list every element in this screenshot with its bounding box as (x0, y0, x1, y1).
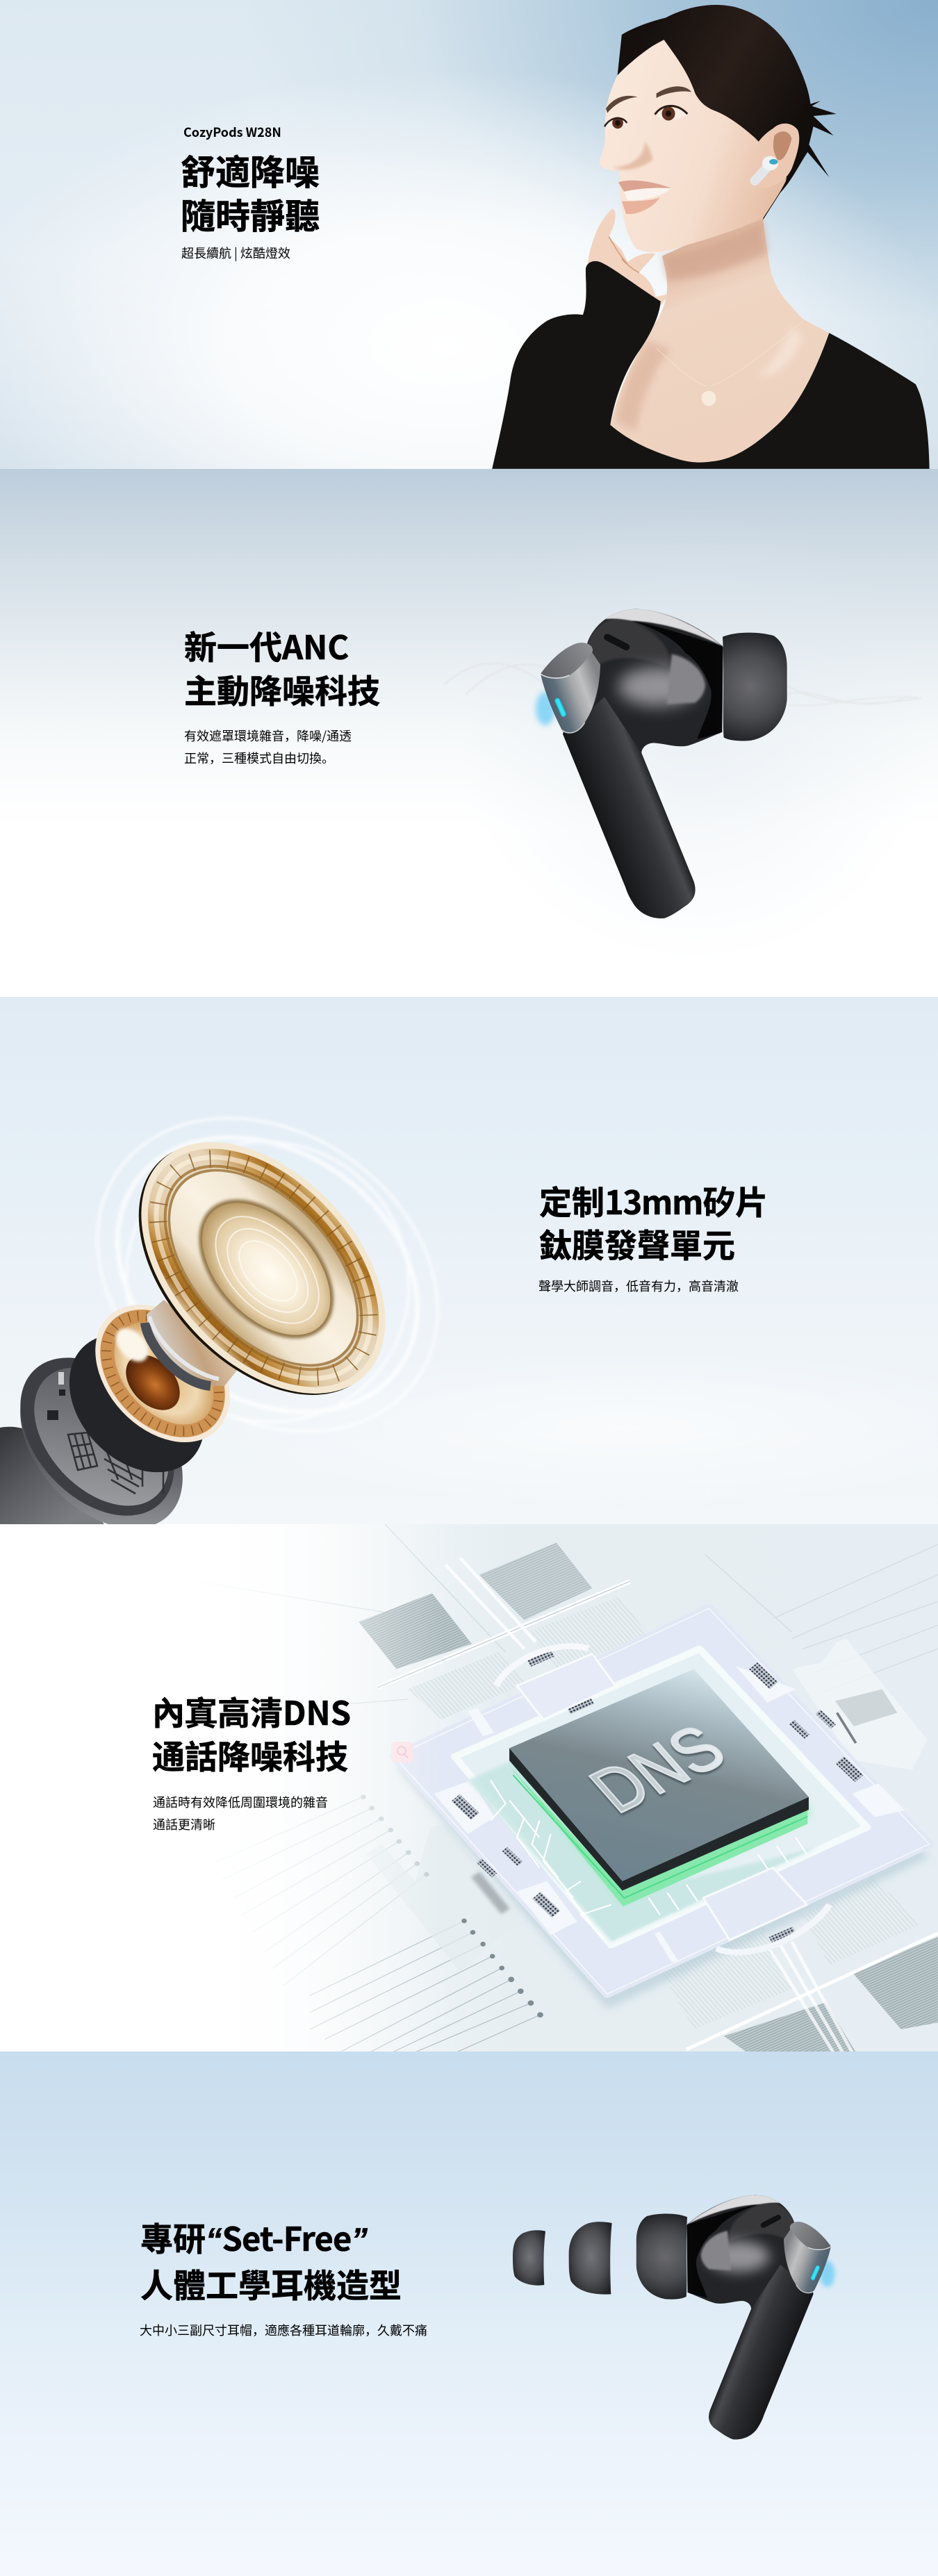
green glow under chip (509, 1760, 809, 1906)
heading: 鈦膜發聲單元 (539, 1219, 735, 1267)
small driver (68, 1278, 257, 1469)
right side comb and module (792, 1639, 928, 1770)
top connector (496, 1646, 616, 1719)
chip body (509, 1669, 809, 1890)
panel: DNS call noise reduction (0, 1524, 938, 2051)
heading: 舒適降噪 (181, 145, 320, 195)
speaker dot pads (452, 1649, 863, 1943)
search icon badge (391, 1742, 413, 1762)
illustration: earbud with three ear tips (513, 2195, 838, 2440)
panel: hero (0, 0, 938, 469)
photo: woman wearing earbud (492, 5, 930, 469)
body text: 通話時有效降低周圍環境的雜音 (153, 1793, 328, 1811)
medium ear tip (569, 2222, 612, 2295)
glass inner board (454, 1649, 867, 1945)
heading: 主動降噪科技 (184, 665, 380, 713)
decorative sound wisps (445, 663, 921, 706)
subtitle: 超長續航 | 炫酷燈效 (181, 244, 290, 262)
PCB base disc (0, 1328, 215, 1560)
heading (184, 621, 380, 713)
glass bars and light beams (377, 1558, 938, 2052)
small ear tip (513, 2230, 545, 2286)
body text: 聲學大師調音，低音有力，高音清澈 (538, 1277, 739, 1295)
ribbon cables (359, 1543, 938, 2052)
body text: 有效遮罩環境雜音，降噪/通透 (184, 727, 352, 745)
bottom connector (703, 1867, 830, 1952)
heading: 隨時靜聽 (181, 189, 320, 239)
heading: 內寘高清DNS (152, 1687, 351, 1735)
earbud body (0, 1427, 104, 1524)
frame white bevels (434, 1666, 905, 1962)
heading: 定制13mm矽片 (539, 1176, 768, 1224)
heading (539, 1176, 768, 1267)
panel: ANC noise cancelling (0, 469, 938, 997)
illustration: black earbud with sound wisps (447, 609, 920, 918)
decorative traces (197, 1524, 938, 1985)
heading: 通話降噪科技 (152, 1731, 348, 1778)
circuit traces (491, 1780, 807, 1938)
sound wave rings (37, 1054, 498, 1496)
panel: 13mm driver (0, 997, 938, 1524)
heading (181, 145, 320, 239)
solder dots (461, 1919, 543, 2017)
product name: CozyPods W28N (183, 123, 281, 141)
heading: 新一代ANC (184, 621, 349, 669)
earbud with large ear tip (636, 2195, 835, 2439)
left side comb (366, 1824, 525, 1972)
lavender frame (395, 1608, 929, 1994)
heading: 專研“Set-Free” (140, 2213, 368, 2261)
heading (140, 2213, 402, 2307)
connecting neck (145, 1300, 239, 1386)
heading (152, 1687, 351, 1778)
black retaining ring (42, 1307, 231, 1499)
body text: 正常，三種模式自由切換。 (184, 749, 334, 767)
illustration: exploded driver (0, 1117, 438, 1524)
heading: 人體工學耳機造型 (140, 2259, 402, 2307)
main titanium diaphragm (91, 1095, 433, 1442)
body text (184, 727, 352, 767)
earbud (536, 609, 787, 918)
body text (153, 1793, 328, 1833)
body text: 通話更清晰 (153, 1815, 215, 1833)
illustration: DNS chip on circuit board (296, 1524, 938, 2051)
board shadow (396, 1622, 929, 2009)
chip label text: DNS (575, 1712, 740, 1826)
body text: 大中小三副尺寸耳帽，適應各種耳道輪廓，久戴不痛 (140, 2321, 427, 2339)
panel: Set-Free ergonomic design (0, 2051, 938, 2576)
